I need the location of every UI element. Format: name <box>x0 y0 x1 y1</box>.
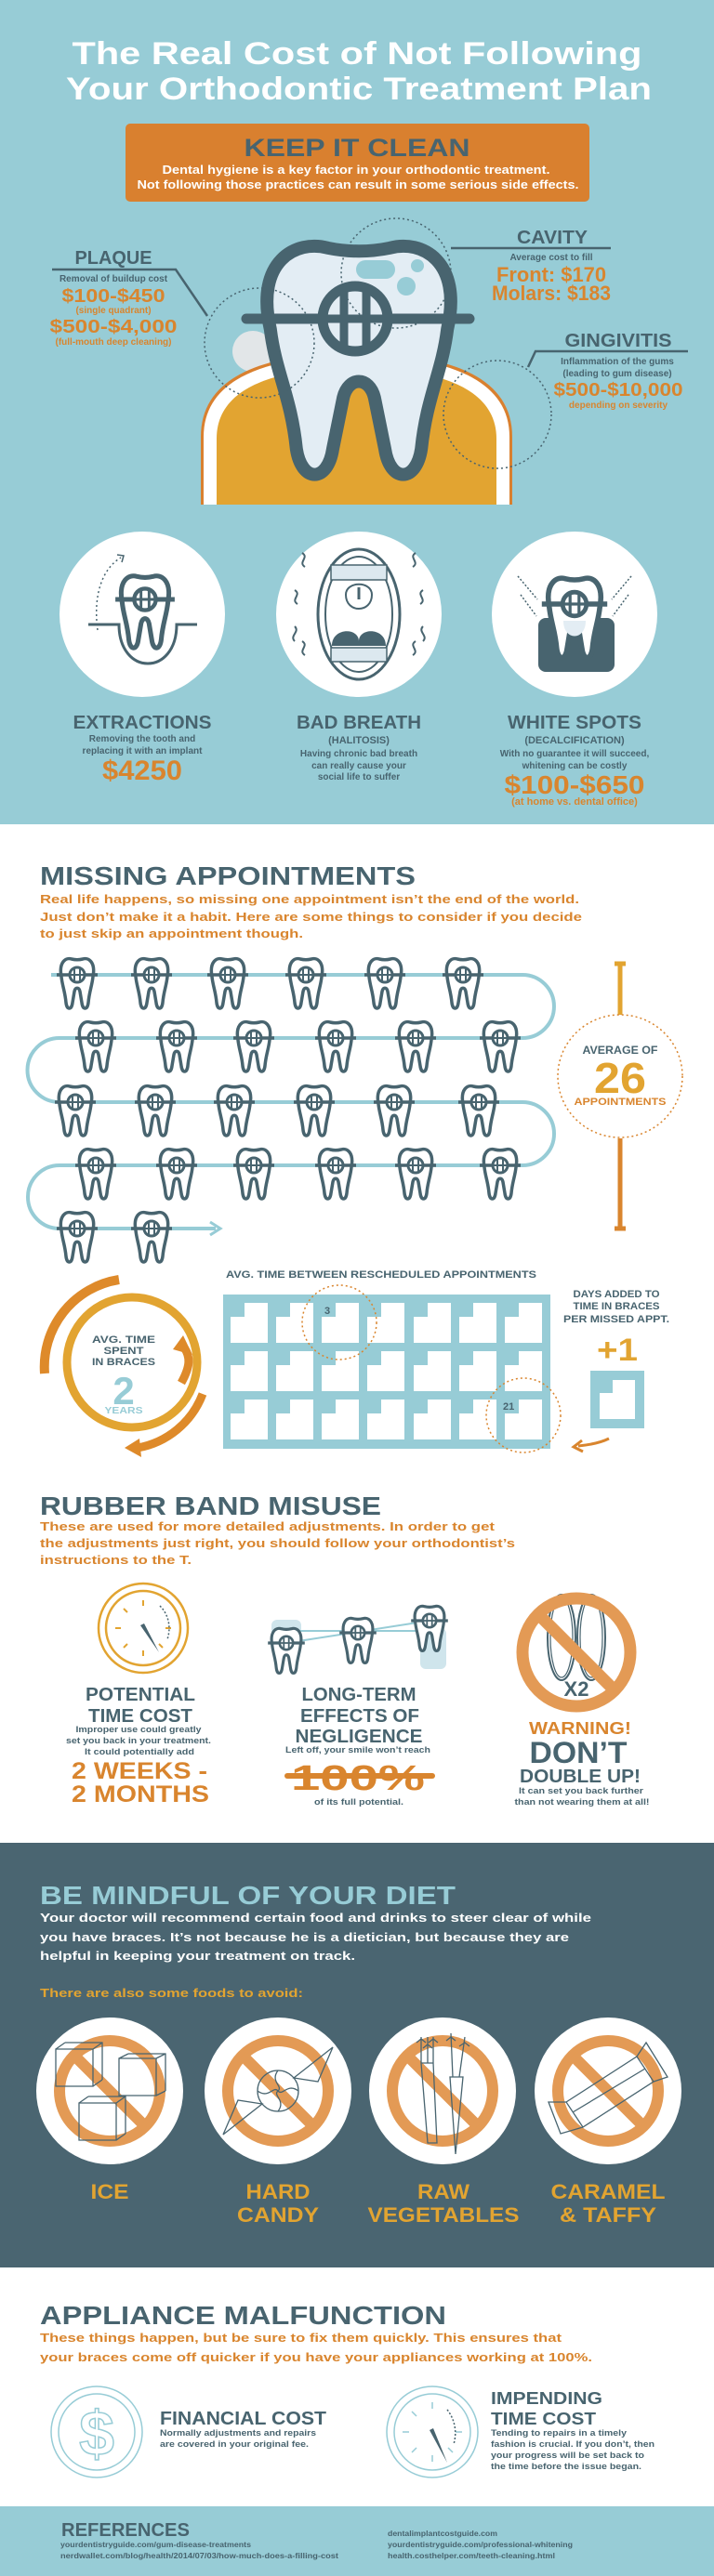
title: The Real Cost of Not Following <box>73 36 641 72</box>
chart: calendar of rescheduled appointments: 3 <box>324 1306 330 1317</box>
text: long-term effects <box>285 1685 432 1807</box>
panel: diet section background <box>0 1843 714 2267</box>
text: impending time cost: fashion is crucial. If you don’t, then <box>491 2439 654 2450</box>
text: food labels <box>91 2180 666 2227</box>
text: warning don't double up: DOUBLE UP! <box>520 1767 641 1787</box>
text: impending time cost <box>491 2389 654 2472</box>
callout: days added per missed appointment: +1 <box>597 1333 638 1368</box>
panel: references: nerdwallet.com/blog/health/2014/07/03/how-much-does-a-filling-cost <box>60 2552 338 2560</box>
text: white spots: (DECALCIFICATION) <box>524 735 625 746</box>
panel: keep it clean banner <box>126 124 589 202</box>
text: white spots: whitening can be costly <box>522 761 628 771</box>
icon: dollar coin: $ <box>79 2399 114 2469</box>
icon: white spots <box>492 532 657 697</box>
text: food labels: & TAFFY <box>560 2203 656 2227</box>
callout: gingivitis: (leading to gum disease) <box>562 369 672 379</box>
text: food labels: CANDY <box>237 2203 319 2227</box>
callout: cavity <box>451 228 611 305</box>
text: potential time cost: TIME COST <box>88 1706 192 1727</box>
heading: missing appointments: Real life happens, so missing one appointment isn’t the end of the world. <box>40 892 579 906</box>
text: impending time cost: your progress will be set back to <box>491 2451 644 2461</box>
heading: rubber band misuse: These are used for more detailed adjustments. In order to get <box>40 1519 496 1533</box>
callout: plaque: PLAQUE <box>74 248 152 269</box>
callout: plaque: Removal of buildup cost <box>60 274 168 284</box>
text: financial cost: FINANCIAL COST <box>160 2409 326 2429</box>
text: white spots: With no guarantee it will succeed, <box>500 749 649 759</box>
text: impending time cost: IMPENDING <box>491 2389 602 2408</box>
text: long-term effects: LONG-TERM <box>301 1685 416 1705</box>
title: Your Orthodontic Treatment Plan <box>66 72 652 107</box>
text: extractions: $4250 <box>102 756 182 786</box>
text: food labels: ICE <box>91 2180 128 2203</box>
text: financial cost: are covered in your original fee. <box>160 2439 309 2450</box>
chart: avg time in braces circle: AVG. TIME <box>92 1334 155 1346</box>
background: top teal section <box>0 0 714 824</box>
chart: calendar of rescheduled appointments <box>223 1269 561 1452</box>
heading: appliance malfunction: These things happen, but be sure to fix them quickly. This ensures that <box>40 2331 562 2345</box>
panel: references: REFERENCES <box>61 2520 190 2541</box>
chart: avg time in braces circle: IN BRACES <box>92 1357 155 1368</box>
text: food labels: HARD <box>245 2180 311 2203</box>
text: extractions: Removing the tooth and <box>89 734 195 744</box>
heading: rubber band misuse: instructions to the T. <box>40 1553 192 1567</box>
heading: appliance malfunction <box>40 2301 592 2364</box>
text: potential time cost: 2 WEEKS - <box>72 1758 207 1784</box>
icon: clock (potential time cost) <box>99 1584 188 1673</box>
chart: calendar of rescheduled appointments: 21 <box>503 1401 514 1413</box>
callout: days added per missed appointment: DAYS ADDED TO <box>573 1289 660 1300</box>
callout: gingivitis: GINGIVITIS <box>565 331 671 351</box>
heading: missing appointments: Just don’t make it a habit. Here are some things to consider if you decide <box>40 910 582 924</box>
text: potential time cost: POTENTIAL <box>86 1685 195 1705</box>
heading: be mindful of your diet: Your doctor will recommend certain food and drinks to steer clear of while <box>40 1911 591 1925</box>
callout: gingivitis <box>528 331 688 411</box>
text: warning don't double up <box>515 1719 649 1807</box>
callout: plaque: $100-$450 <box>61 286 165 307</box>
icon: caramel and taffy <box>535 2017 681 2164</box>
text: white spots: $100-$650 <box>504 770 645 799</box>
text: bad breath <box>297 713 421 782</box>
heading: appliance malfunction: APPLIANCE MALFUNCTION <box>40 2301 446 2330</box>
text: food labels: CARAMEL <box>550 2180 666 2203</box>
panel: references: yourdentistryguide.com/professional-whitening <box>388 2541 573 2549</box>
chart: 26 appointment teeth on a wire <box>28 959 554 1262</box>
heading: rubber band misuse: the adjustments just right, you should follow your orthodontist’s <box>40 1536 515 1550</box>
text: potential time cost: It could potentially add <box>85 1747 194 1757</box>
heading: be mindful of your diet: There are also some foods to avoid: <box>40 1986 303 2000</box>
callout: gingivitis: $500-$10,000 <box>554 380 682 401</box>
text: long-term effects: NEGLIGENCE <box>296 1727 422 1747</box>
heading: rubber band misuse <box>40 1492 515 1567</box>
callout: plaque: (full-mouth deep cleaning) <box>56 337 171 348</box>
text: potential time cost <box>66 1685 211 1807</box>
text: potential time cost: Improper use could greatly <box>76 1725 202 1735</box>
callout: plaque: (single quadrant) <box>75 306 152 316</box>
callout: gingivitis: Inflammation of the gums <box>561 357 674 367</box>
callout: cavity: Front: $170 <box>496 263 606 286</box>
text: bad breath: social life to suffer <box>318 772 400 782</box>
heading: appliance malfunction: your braces come off quicker if you have your appliances working at 100%. <box>40 2350 592 2364</box>
text: financial cost <box>160 2409 326 2450</box>
text: impending time cost: the time before the issue began. <box>491 2462 641 2472</box>
text: long-term effects: 100% <box>291 1759 425 1798</box>
icon: raw vegetables <box>369 2017 516 2164</box>
callout: average of 26 appointments: APPOINTMENTS <box>575 1097 666 1108</box>
text: potential time cost: 2 MONTHS <box>72 1781 209 1807</box>
text: financial cost: Normally adjustments and repairs <box>160 2428 316 2438</box>
callout: days added per missed appointment <box>563 1289 669 1452</box>
callout: average of 26 appointments <box>558 964 682 1229</box>
chart: avg time in braces circle: 2 <box>112 1369 135 1413</box>
text: food labels: VEGETABLES <box>368 2203 519 2227</box>
text: impending time cost: Tending to repairs in a timely <box>491 2428 628 2438</box>
callout: days added per missed appointment: TIME IN BRACES <box>573 1301 660 1312</box>
heading: missing appointments <box>40 861 582 940</box>
callout: average of 26 appointments: AVERAGE OF <box>582 1045 658 1057</box>
heading: be mindful of your diet <box>40 1881 591 2000</box>
icon: clock (impending time cost) <box>387 2386 478 2477</box>
callout: cavity: Molars: $183 <box>492 282 611 305</box>
text: warning don't double up: DON’T <box>530 1736 628 1769</box>
panel: references <box>0 2506 714 2576</box>
panel: keep it clean banner: Not following those practices can result in some serious side effects. <box>138 178 578 191</box>
heading: missing appointments: to just skip an appointment though. <box>40 927 303 940</box>
text: long-term effects: Left off, your smile won’t reach <box>285 1745 430 1755</box>
text: white spots <box>500 713 649 808</box>
callout: cavity: CAVITY <box>517 228 588 248</box>
icon: teeth with rubber bands <box>268 1606 448 1673</box>
heading: missing appointments: MISSING APPOINTMENTS <box>40 861 416 890</box>
callout: days added per missed appointment: PER MISSED APPT. <box>563 1314 669 1325</box>
callout: plaque <box>50 248 207 348</box>
text: warning don't double up: WARNING! <box>529 1719 631 1738</box>
chart: calendar of rescheduled appointments: AVG. TIME BETWEEN RESCHEDULED APPOINTMENTS <box>226 1269 536 1281</box>
text: extractions: replacing it with an implant <box>83 746 203 756</box>
text: bad breath: (HALITOSIS) <box>328 735 390 746</box>
icon: dollar coin <box>51 2386 142 2477</box>
icon: bad breath <box>276 532 442 697</box>
panel: references: health.costhelper.com/teeth-cleaning.html <box>388 2552 555 2560</box>
panel: keep it clean banner: Dental hygiene is a key factor in your orthodontic treatment. <box>162 164 550 177</box>
callout: plaque: $500-$4,000 <box>50 317 177 337</box>
callout: gingivitis: depending on severity <box>569 401 668 411</box>
chart: avg time in braces circle: SPENT <box>104 1346 144 1357</box>
text: warning don't double up: It can set you back further <box>519 1786 643 1796</box>
icon: extractions <box>60 532 225 697</box>
chart: avg time in braces circle: YEARS <box>104 1406 143 1416</box>
text: bad breath: BAD BREATH <box>297 713 421 733</box>
icon: no doubling rubber bands <box>522 1595 630 1706</box>
icon: hard candy <box>205 2017 351 2164</box>
heading: rubber band misuse: RUBBER BAND MISUSE <box>40 1492 381 1520</box>
callout: average of 26 appointments: 26 <box>594 1054 646 1102</box>
text: bad breath: Having chronic bad breath <box>300 749 417 759</box>
heading: be mindful of your diet: BE MINDFUL OF YOUR DIET <box>40 1881 456 1910</box>
text: long-term effects: of its full potential. <box>314 1797 403 1807</box>
heading: be mindful of your diet: you have braces. It’s not because he is a dietician, but because they are <box>40 1930 569 1944</box>
text: warning don't double up: than not wearing them at all! <box>515 1797 649 1807</box>
chart: avg time in braces circle <box>45 1280 203 1457</box>
text: impending time cost: TIME COST <box>491 2410 596 2428</box>
title <box>66 36 652 107</box>
heading: be mindful of your diet: helpful in keeping your treatment on track. <box>40 1949 355 1963</box>
illustration: big tooth with braces and gums <box>201 218 551 505</box>
text: white spots: (at home vs. dental office) <box>511 796 638 808</box>
panel: references: dentalimplantcostguide.com <box>388 2530 497 2538</box>
text: extractions <box>73 713 212 786</box>
callout: cavity: Average cost to fill <box>509 253 593 263</box>
text: potential time cost: set you back in your treatment. <box>66 1736 211 1746</box>
text: bad breath: can really cause your <box>311 761 406 771</box>
panel: references: yourdentistryguide.com/gum-disease-treatments <box>60 2541 252 2549</box>
text: food labels: RAW <box>417 2180 469 2203</box>
panel: keep it clean banner: KEEP IT CLEAN <box>244 134 470 162</box>
icon: ice <box>36 2017 183 2164</box>
icon: no doubling rubber bands: X2 <box>564 1677 588 1701</box>
text: long-term effects: EFFECTS OF <box>300 1706 419 1727</box>
text: white spots: WHITE SPOTS <box>508 713 641 733</box>
text: extractions: EXTRACTIONS <box>73 713 212 733</box>
